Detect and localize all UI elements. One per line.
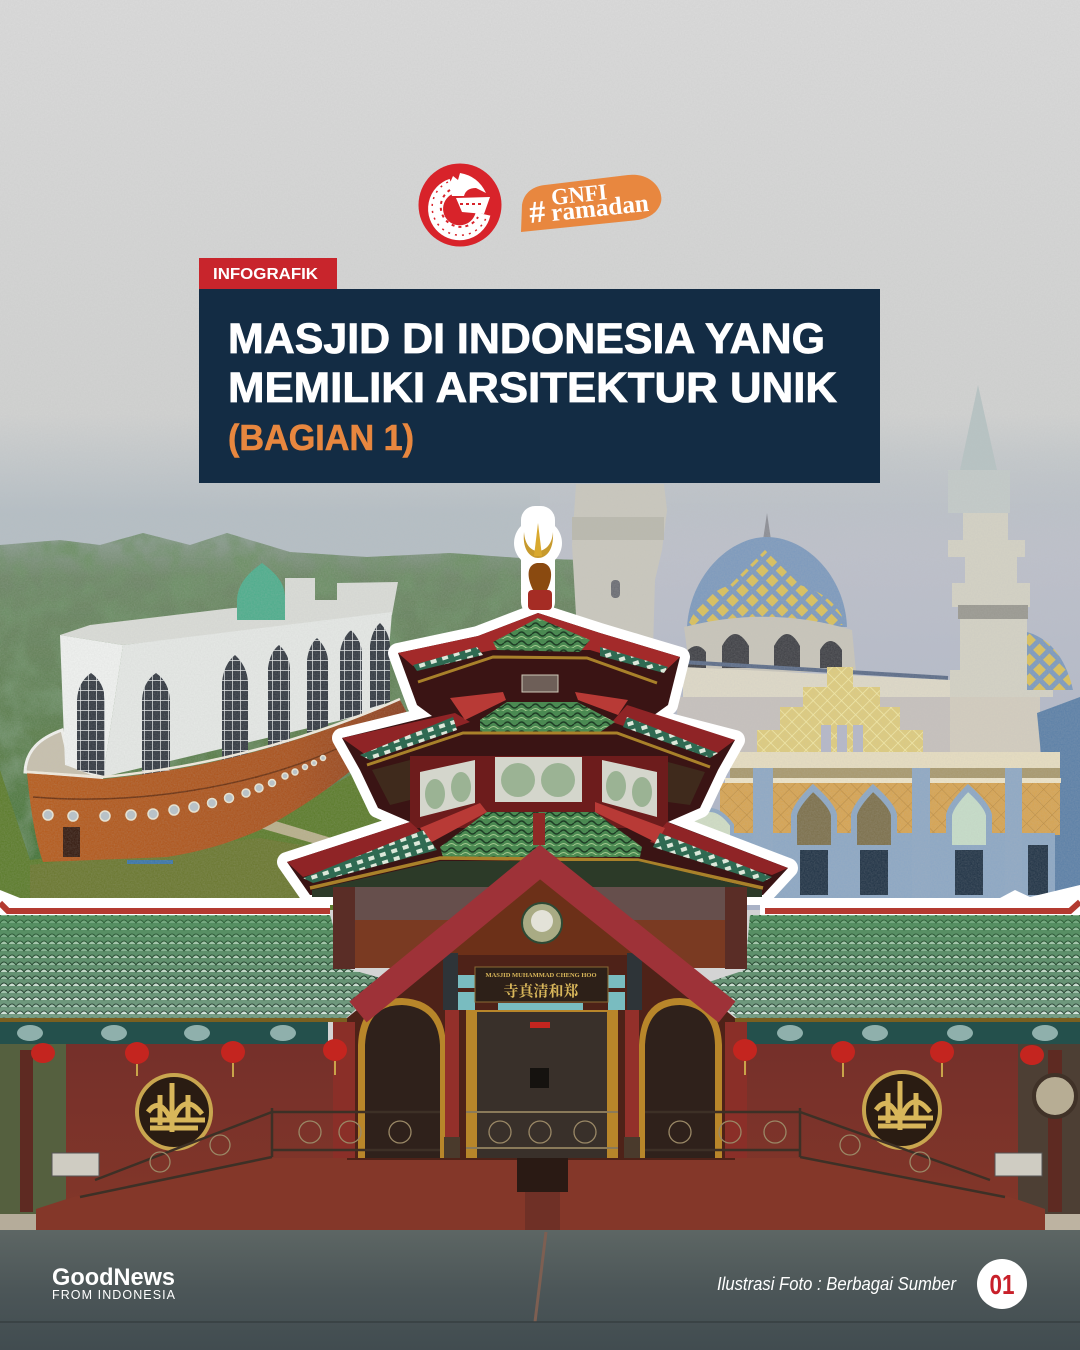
- garden path: [260, 820, 338, 848]
- frieze band: [730, 768, 1060, 779]
- tier 1 left tiles: [413, 647, 483, 671]
- name board: MASJID MUHAMMAD CHENG HOO: [485, 972, 597, 979]
- railing scrolls: [150, 1121, 930, 1172]
- tier 2 centre window: [495, 757, 582, 802]
- centre railing: [466, 1112, 618, 1148]
- small right dome: [1027, 632, 1073, 690]
- portholes: [43, 756, 326, 821]
- hashtag badge: GNFI ramadan: GNFI: [550, 179, 608, 210]
- hull rim: [27, 699, 400, 777]
- right minaret dark band: [958, 605, 1028, 619]
- footer logo: GoodNews from Indonesia: FROM INDONESIA: [52, 1288, 176, 1302]
- title text: MASJID DI INDONESIA YANG: [228, 315, 825, 363]
- frieze motifs: [17, 1025, 1058, 1041]
- gong: [1034, 1075, 1076, 1117]
- dark pagoda base shape: [287, 613, 788, 895]
- hull door: [63, 827, 80, 857]
- right garden beyond the hall: [1015, 1040, 1080, 1220]
- page number badge: [977, 1259, 1027, 1309]
- cream line: [725, 778, 1061, 783]
- blue pillars: [753, 768, 1022, 898]
- green dome: [237, 563, 285, 620]
- white sticker band above the main roof: [0, 885, 1080, 925]
- left outside column: [20, 1050, 33, 1212]
- centre plaque: [517, 1158, 568, 1192]
- door openings: [800, 845, 1048, 895]
- main dome gold lattice: [688, 550, 846, 625]
- golden lattice gable: [757, 667, 923, 757]
- painted frieze right: [745, 1022, 1080, 1044]
- upper grey frieze: [333, 887, 747, 920]
- tier 1 red wings and ridge: [398, 613, 680, 672]
- gable wall: [347, 860, 735, 1160]
- eave line: [0, 1018, 1080, 1022]
- garuda head: [449, 173, 486, 196]
- facade arches: [794, 788, 989, 848]
- finial orb: [529, 563, 551, 590]
- round emblem in gable: [522, 903, 562, 943]
- left garden beyond the hall: [0, 1040, 72, 1220]
- main mosque: Cheng Hoo lower hall: [0, 902, 1080, 1350]
- drum arches: [686, 634, 842, 668]
- dome finial: [763, 513, 771, 540]
- tier 2 left window: [420, 760, 475, 817]
- hashtag badge: GNFI ramadan: ramadan: [550, 190, 650, 227]
- dome drum: [684, 617, 856, 672]
- plaque stand: [525, 1192, 560, 1230]
- ring mosaic outer: [432, 182, 486, 235]
- left pavement: [0, 1214, 40, 1230]
- left upper column: [333, 887, 355, 969]
- entrance columns: [445, 1010, 639, 1137]
- central mosque front: gable and entrance: [31, 860, 1044, 1230]
- stone base: [36, 1158, 1045, 1230]
- white building front: [103, 612, 392, 777]
- hashtag badge: GNFI ramadan: #: [527, 195, 548, 230]
- column bases: [444, 1137, 640, 1158]
- right arch frame: [639, 998, 722, 1158]
- G bar: [456, 197, 490, 214]
- centre door interior: [477, 1012, 607, 1158]
- tier 2 right tiles: [623, 717, 718, 758]
- gable small windows: [821, 725, 863, 755]
- partly hidden arch: [688, 810, 732, 900]
- small door sign: [530, 1022, 550, 1028]
- finial base: [528, 590, 552, 610]
- upper wall: [677, 697, 973, 759]
- title panel: MEMILIKI ARSITEKTUR UNIK: [228, 364, 837, 412]
- upper brick wall: [355, 920, 725, 968]
- plaza centre line: [535, 1232, 546, 1322]
- right roof tiles: [700, 915, 1080, 1019]
- right stair railing: [645, 1108, 1005, 1197]
- hashtag badge: GNFI ramadan: [521, 175, 661, 232]
- right roof ridge: [765, 902, 1080, 911]
- right upper column: [725, 887, 747, 969]
- gable upper brick: [450, 860, 632, 955]
- left calligraphy medallion: [137, 1075, 211, 1149]
- arched windows: [77, 623, 390, 776]
- left minaret window: [611, 580, 620, 598]
- white outline: [287, 613, 788, 895]
- deck railing: [25, 730, 103, 778]
- pagoda tower with white sticker outline: [287, 506, 788, 897]
- tier 3 right brace: [595, 802, 665, 843]
- footer logo: GoodNews from Indonesia: GoodNews: [52, 1264, 175, 1291]
- white building roof: [60, 578, 398, 645]
- tier 3 red wings: [287, 822, 788, 877]
- plaza seam: [0, 1321, 1080, 1323]
- upper minaret haze: [948, 470, 1010, 513]
- ground plaza: [0, 1230, 1080, 1350]
- right tower lower wall: [950, 697, 1040, 762]
- ground grass: [0, 730, 430, 910]
- tier 1 right tiles: [600, 647, 668, 673]
- film grain over upper photo area: [0, 0, 1080, 905]
- tier 2 left brace: [450, 692, 506, 720]
- centre ridge post: [533, 813, 545, 845]
- right scene: sky behind the mosque: [540, 440, 1080, 910]
- right minaret shaft: [948, 470, 1053, 765]
- left minaret balcony: [572, 517, 664, 540]
- right minaret spire: [960, 385, 997, 470]
- background: grey paper with hazy sky: [0, 0, 1080, 900]
- outer left column: [333, 1022, 355, 1158]
- left mosque: ark-shaped building: [0, 563, 430, 910]
- blue lower wall: [720, 833, 1055, 898]
- painted frieze left: [0, 1022, 328, 1044]
- name board: [475, 967, 608, 1002]
- left roof ridge: [0, 903, 330, 911]
- G ring: [436, 186, 483, 233]
- left roof tint: [0, 915, 388, 1019]
- tier 3 right tiles: [653, 833, 772, 882]
- logo: red circle with garuda G: [418, 164, 502, 246]
- right arch interior: [645, 1005, 715, 1158]
- red wall: [66, 1042, 1018, 1212]
- blue pipe: [127, 860, 173, 864]
- main dome blue: [687, 537, 847, 627]
- tier 2 gold eave: [367, 733, 710, 767]
- tier 1 centre tiles: [493, 618, 590, 652]
- white building side: [60, 635, 123, 777]
- outer right column: [725, 1022, 747, 1158]
- lanterns: [31, 1039, 1044, 1077]
- dark side posts: [443, 953, 642, 1010]
- tier 2 right window: [602, 760, 657, 817]
- right info sign: [995, 1153, 1042, 1176]
- left roof tiles: [0, 915, 388, 1019]
- ring mosaic: [441, 190, 478, 227]
- left scene: forest hills: [0, 533, 580, 910]
- right pavement: [1045, 1214, 1080, 1230]
- blue right side wall: [1037, 697, 1080, 900]
- tier 2 centre tiles: [480, 702, 615, 732]
- left arch interior: [365, 1005, 440, 1158]
- tier 3 left tiles: [303, 830, 437, 883]
- tier 3 left brace: [420, 803, 487, 843]
- tier 2 left tiles: [360, 717, 457, 760]
- right mosque: domes, minarets and decorated facade: [572, 385, 1080, 900]
- left info sign: [52, 1153, 99, 1176]
- tier 2 right brace: [575, 692, 628, 715]
- finial stem halo: [521, 506, 555, 616]
- subtitle text: (BAGIAN 1): [228, 417, 414, 458]
- door panel: [530, 1068, 549, 1088]
- tier 1 small panel: [522, 675, 558, 692]
- tier 2 side eaves left: [372, 760, 410, 805]
- tier 3 underside: [312, 861, 762, 897]
- label: INFOGRAFIK: INFOGRAFIK: [213, 266, 318, 283]
- hull of the ark: [27, 700, 407, 862]
- tier 3 centre tiles: [440, 812, 642, 857]
- bar mosaic: [460, 203, 484, 205]
- lower olive grass: [30, 838, 330, 905]
- roof shadow line: [683, 662, 948, 678]
- left minaret: [572, 484, 667, 650]
- right roof tint: [700, 915, 1080, 1019]
- tier 2 red body: [410, 756, 668, 828]
- tier 2 side eaves right: [668, 762, 705, 805]
- red gable rafters: [358, 862, 727, 1012]
- right calligraphy medallion: [864, 1072, 940, 1148]
- label: INFOGRAFIK: [199, 258, 337, 289]
- cream band: [730, 752, 1060, 768]
- centre door frame: [466, 1010, 618, 1158]
- lower golden wall: [720, 783, 1060, 835]
- tier 3 gold eave: [310, 858, 763, 888]
- tier 1 gold eave: [418, 657, 657, 683]
- name board: 寺真清和郑: [503, 982, 579, 1000]
- page number badge: 01: [990, 1269, 1014, 1300]
- finial white halo: [514, 519, 562, 567]
- left arch frame: [358, 998, 446, 1158]
- left stair railing: [80, 1108, 440, 1197]
- title panel: [199, 289, 880, 483]
- gold crescent finial: [524, 523, 553, 558]
- photo credit: Ilustrasi Foto : Berbagai Sumber: [717, 1274, 957, 1294]
- cream upper cornice: [683, 667, 950, 703]
- right outside column: [1048, 1050, 1062, 1212]
- hull plank line: [33, 745, 345, 799]
- tier 2 red wings: [342, 705, 735, 758]
- pale blue lintel: [458, 975, 625, 1010]
